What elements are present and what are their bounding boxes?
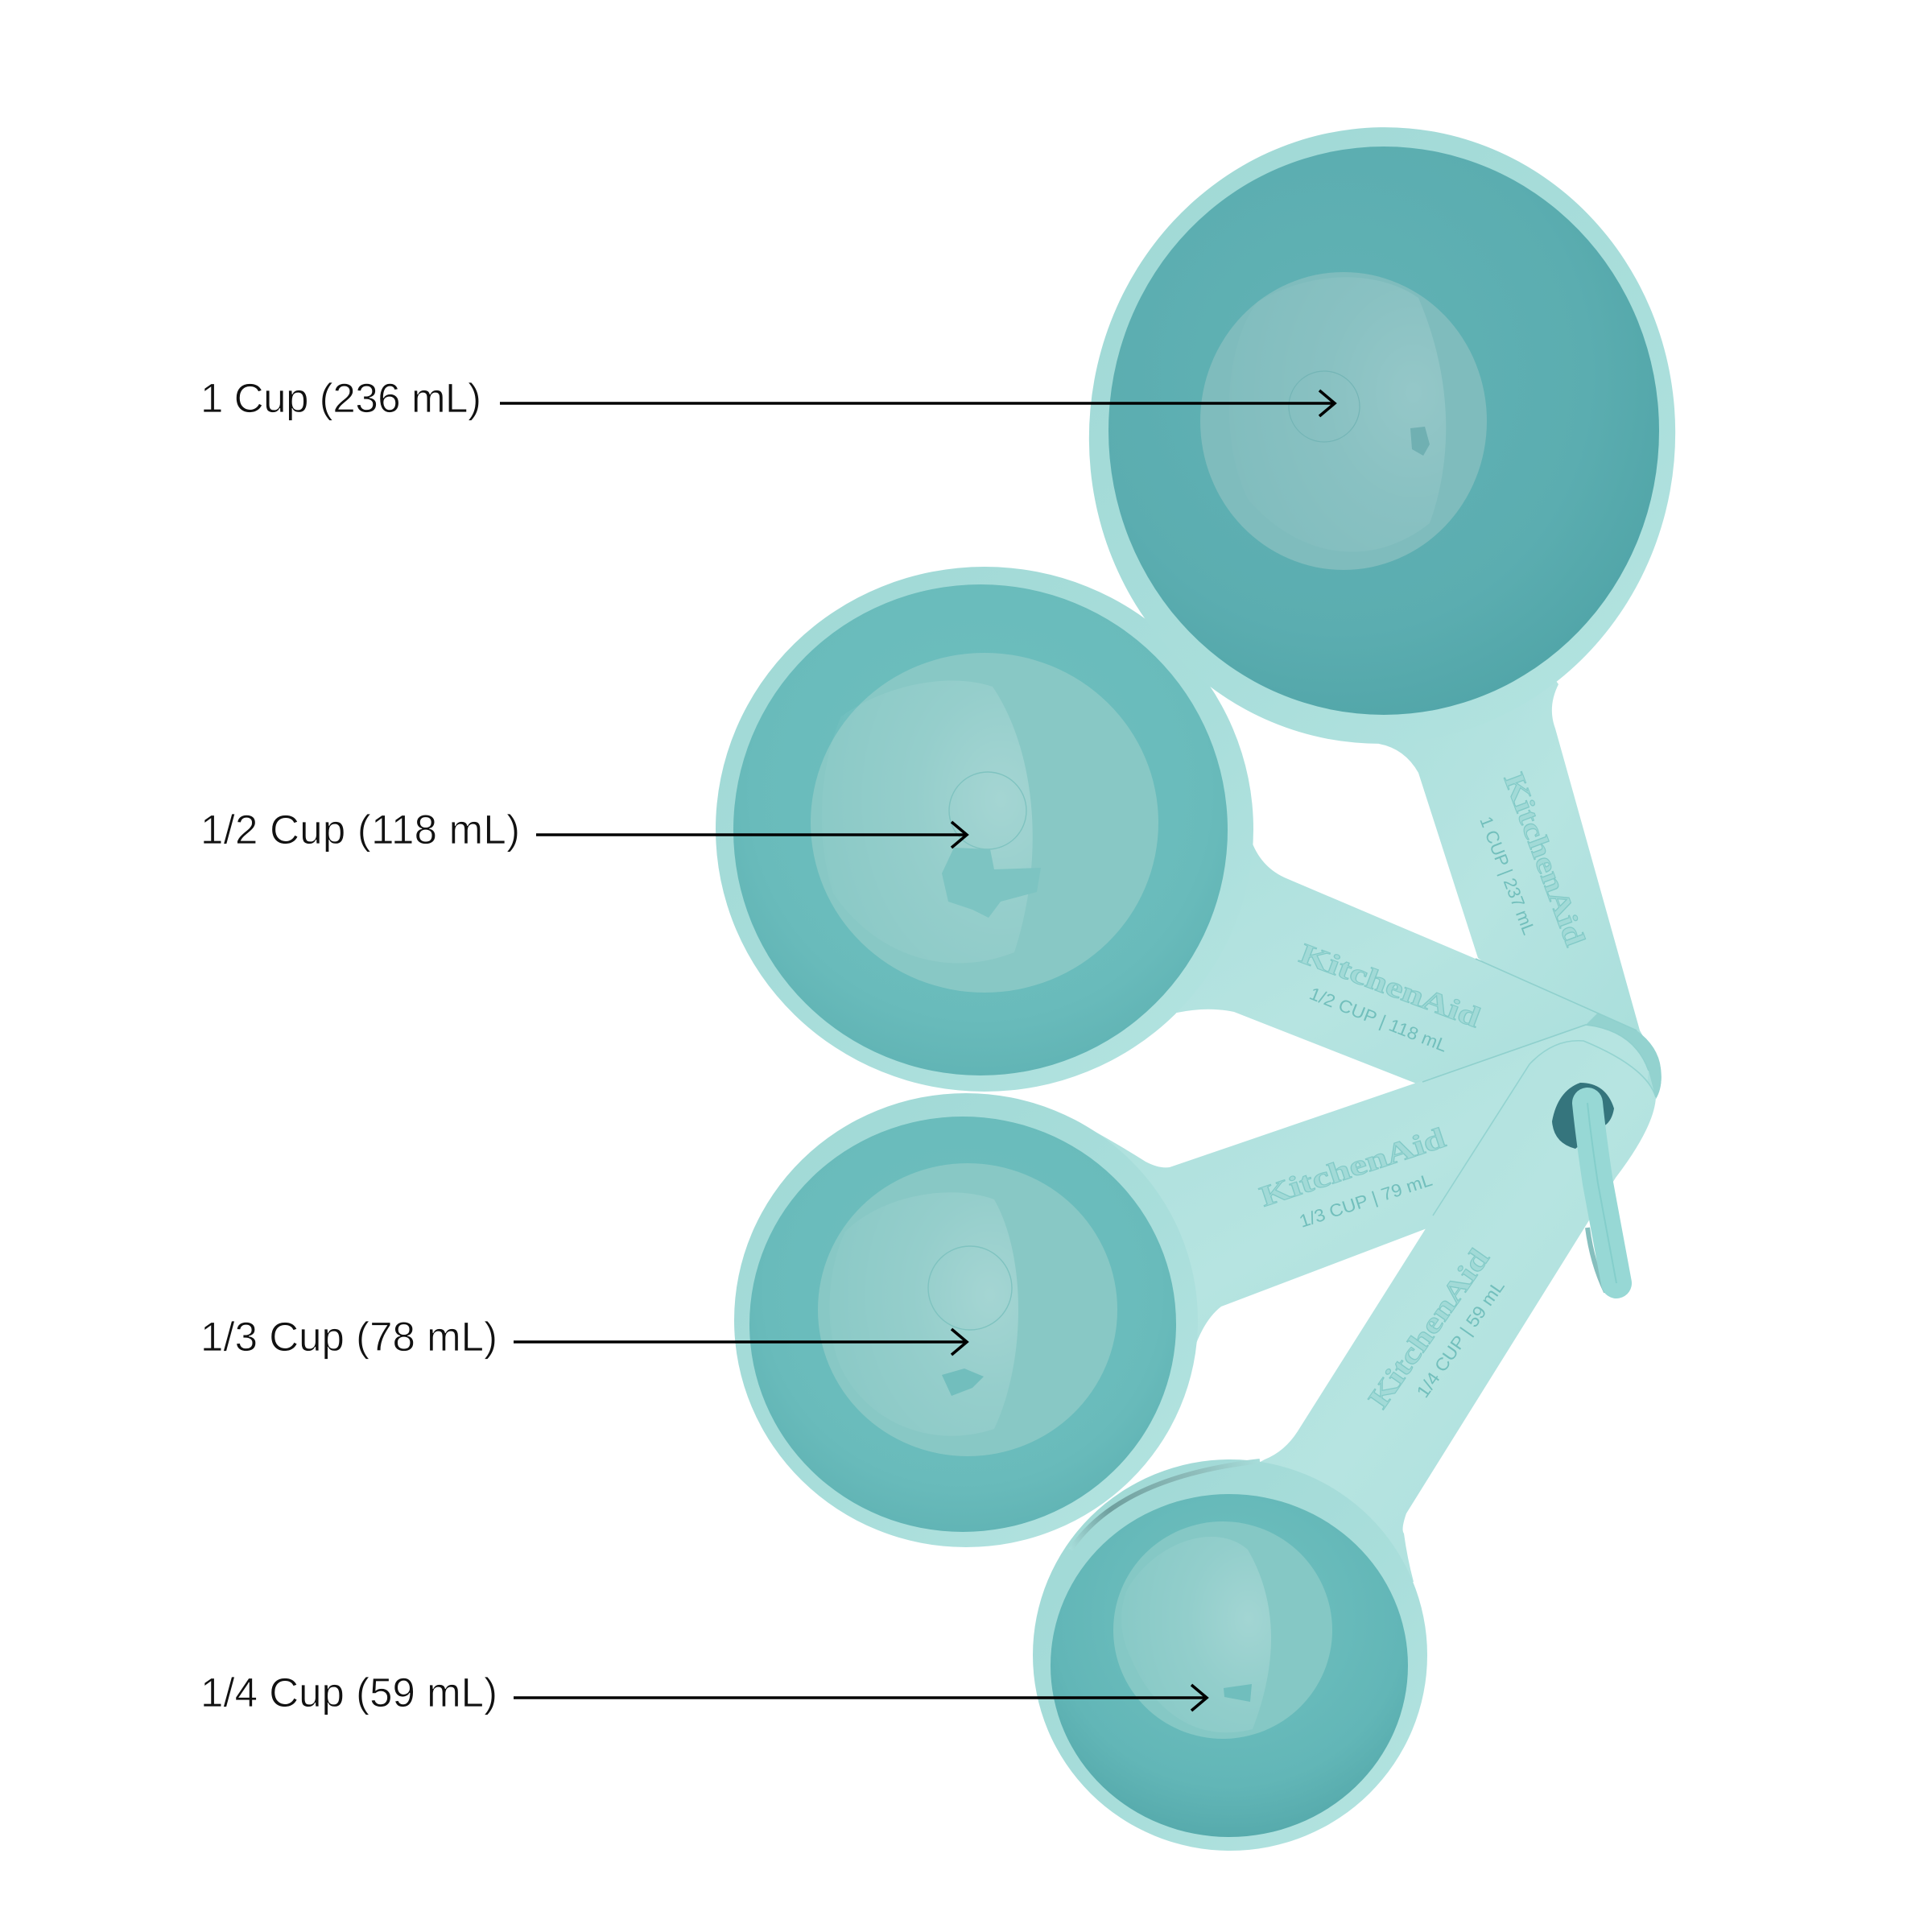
label: 1/3 cup: 1/3 Cup (78 mL)	[200, 1314, 497, 1360]
size text: 1/2 cup handle: 1/2 CUP | 118 mL	[1307, 983, 1451, 1056]
embossed brand: 1/3 cup handle: KitchenAid	[1256, 1121, 1449, 1213]
arrow: 1 cup	[500, 390, 1335, 416]
label: 1 cup: 1 Cup (236 mL)	[200, 375, 481, 421]
arrow: 1/4 cup	[514, 1685, 1207, 1711]
embossed brand: 1/4 cup handle: KitchenAid	[1362, 1243, 1496, 1414]
hanging ring	[1552, 1083, 1616, 1292]
handle: 1/2 cup	[1159, 805, 1662, 1103]
label: 1/4 cup: 1/4 Cup (59 mL)	[200, 1670, 497, 1715]
size text: 1/4 cup handle: 1/4 CUP | 59 mL	[1413, 1277, 1509, 1402]
embossed brand: 1/2 cup handle: KitchenAid	[1295, 937, 1484, 1034]
cup: 1/2 cup bowl	[716, 567, 1253, 1092]
arrow: 1/3 cup	[514, 1329, 967, 1355]
cup: 1/4 cup bowl	[1033, 1459, 1427, 1851]
cup: 1/3 cup bowl	[734, 1093, 1198, 1547]
handle: 1 cup	[1368, 644, 1661, 1068]
size text: 1 cup handle: 1 CUP | 237 mL	[1476, 814, 1539, 937]
arrow: 1/2 cup	[536, 822, 967, 848]
size text: 1/3 cup handle: 1/3 CUP | 79 mL	[1297, 1170, 1435, 1232]
label: 1/2 cup: 1/2 Cup (118 mL)	[200, 807, 520, 852]
embossed brand: 1 cup handle: KitchenAid	[1498, 769, 1591, 950]
handle: 1/4 cup	[1240, 1041, 1656, 1594]
handle: 1/3 cup	[1087, 1025, 1649, 1352]
cup: 1 cup bowl	[1063, 103, 1701, 768]
